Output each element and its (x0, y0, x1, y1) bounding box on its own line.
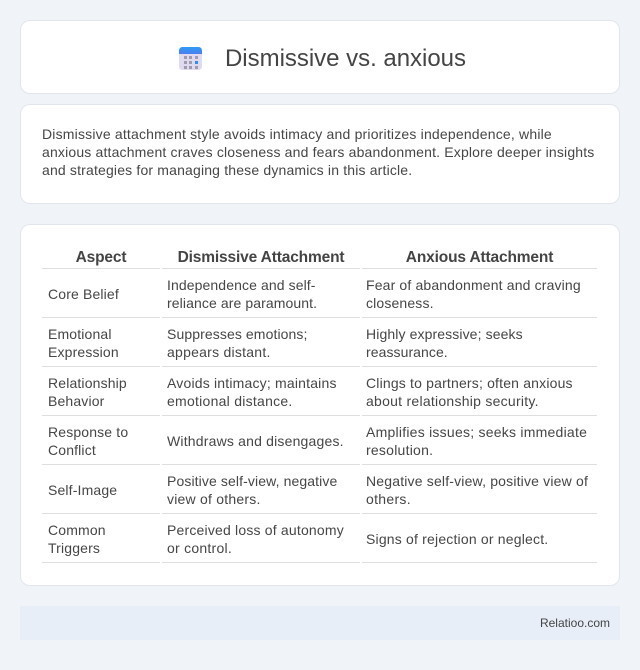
row: self-image: Self-Image (48, 482, 117, 498)
title: Dismissive vs. anxious (225, 45, 466, 72)
row: core belief: Core Belief (48, 286, 119, 302)
row: response to conflict (48, 424, 587, 458)
table header: dismissive attachment: Dismissive Attachment (178, 249, 344, 266)
row: core belief (48, 277, 581, 311)
row: common triggers: Signs of rejection or neglect. (366, 531, 548, 547)
row: emotional expression (48, 326, 523, 360)
row: core belief: Fear of abandonment and craving (366, 277, 581, 293)
icon: calendar (179, 47, 202, 70)
footer bar (20, 606, 620, 640)
table header: anxious attachment: Anxious Attachment (406, 249, 553, 266)
row: emotional expression: Expression (48, 344, 119, 360)
row: core belief: Independence and self- (167, 277, 316, 293)
row: core belief: closeness. (366, 295, 434, 311)
row: self-image (48, 473, 588, 507)
row: relationship behavior: Avoids intimacy; maintains (167, 375, 337, 391)
row: self-image: Negative self-view, positive view of (366, 473, 588, 489)
row: response to conflict: Response to (48, 424, 128, 440)
intro text: and strategies for managing these dynamics in this article. (42, 162, 412, 178)
panel: introduction (20, 104, 620, 204)
row: relationship behavior: Clings to partners; often anxious (366, 375, 573, 391)
row: emotional expression: Suppresses emotions; (167, 326, 308, 342)
intro text (42, 126, 594, 178)
row: self-image: view of others. (167, 491, 261, 507)
row: relationship behavior: emotional distance. (167, 393, 293, 409)
row: response to conflict: resolution. (366, 442, 433, 458)
table header: aspect: Aspect (76, 249, 126, 266)
row: response to conflict: Amplifies issues; seeks immediate (366, 424, 587, 440)
row: emotional expression: Emotional (48, 326, 112, 342)
row: emotional expression: appears distant. (167, 344, 271, 360)
row: core belief: reliance are paramount. (167, 295, 317, 311)
row: emotional expression: reassurance. (366, 344, 448, 360)
row: relationship behavior: about relationship security. (366, 393, 539, 409)
panel: comparison table card (20, 224, 620, 586)
row: relationship behavior: Relationship (48, 375, 127, 391)
panel: title card (20, 20, 620, 94)
row: common triggers: Perceived loss of autonomy (167, 522, 344, 538)
row: relationship behavior (48, 375, 573, 409)
footer text: Relatioo.com (540, 616, 610, 630)
row: response to conflict: Withdraws and disengages. (167, 433, 344, 449)
row: relationship behavior: Behavior (48, 393, 104, 409)
row: common triggers: Triggers (48, 540, 100, 556)
intro text: anxious attachment craves closeness and fears abandonment. Explore deeper insights (42, 144, 594, 160)
row: common triggers: or control. (167, 540, 232, 556)
row: response to conflict: Conflict (48, 442, 96, 458)
row: common triggers: Common (48, 522, 106, 538)
intro text: Dismissive attachment style avoids intimacy and prioritizes independence, while (42, 126, 552, 142)
row: self-image: others. (366, 491, 411, 507)
row: emotional expression: Highly expressive; seeks (366, 326, 523, 342)
row: self-image: Positive self-view, negative (167, 473, 337, 489)
row: common triggers (48, 522, 548, 556)
